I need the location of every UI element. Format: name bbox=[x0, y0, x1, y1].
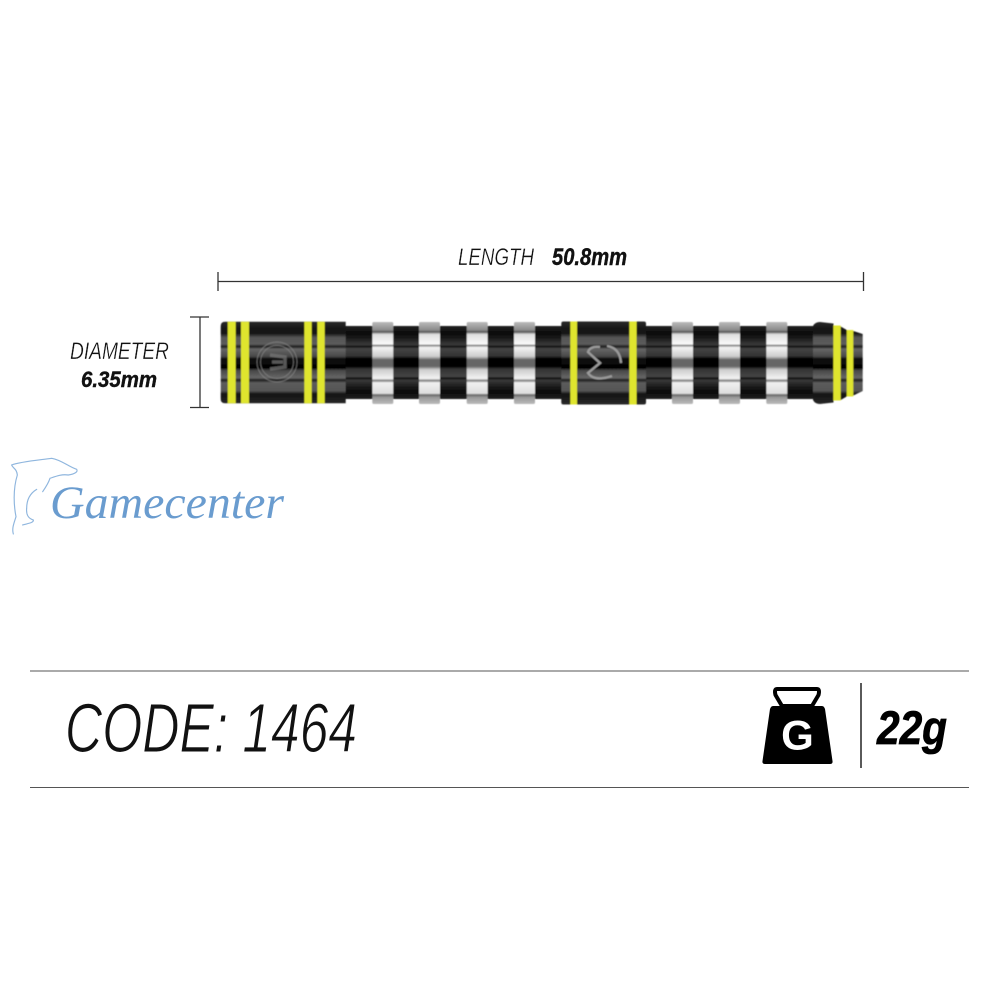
wordmark: Gamecenter bbox=[50, 477, 285, 529]
length label: 50.8mm bbox=[552, 244, 627, 271]
diameter label: DIAMETER bbox=[70, 338, 169, 365]
weight value: 22g bbox=[876, 701, 947, 754]
icon: weight: G bbox=[781, 712, 814, 758]
dart barrel bbox=[221, 322, 863, 404]
info band rules bbox=[30, 671, 969, 788]
diameter label bbox=[70, 338, 169, 392]
barrel middle grip section bbox=[561, 322, 646, 404]
diameter dimension line bbox=[190, 317, 209, 408]
product code: CODE: 1464 bbox=[65, 689, 357, 767]
barrel front section bbox=[813, 322, 863, 404]
diameter label: 6.35mm bbox=[81, 367, 157, 392]
icon: M logo bbox=[588, 346, 621, 378]
icon: weight bbox=[762, 689, 833, 764]
icon: round B logo bbox=[257, 342, 297, 382]
icon: dolphin outline bbox=[12, 458, 77, 534]
length dimension line bbox=[218, 272, 864, 291]
watermark: Gamecenter logo bbox=[12, 458, 285, 534]
yellow stripes bbox=[228, 322, 853, 404]
barrel rear grip section bbox=[221, 322, 346, 403]
silver rings bbox=[372, 322, 787, 404]
barrel narrow shaft bbox=[345, 326, 815, 399]
divider bbox=[860, 683, 862, 768]
length label: LENGTH bbox=[458, 244, 535, 271]
length label bbox=[458, 244, 627, 271]
